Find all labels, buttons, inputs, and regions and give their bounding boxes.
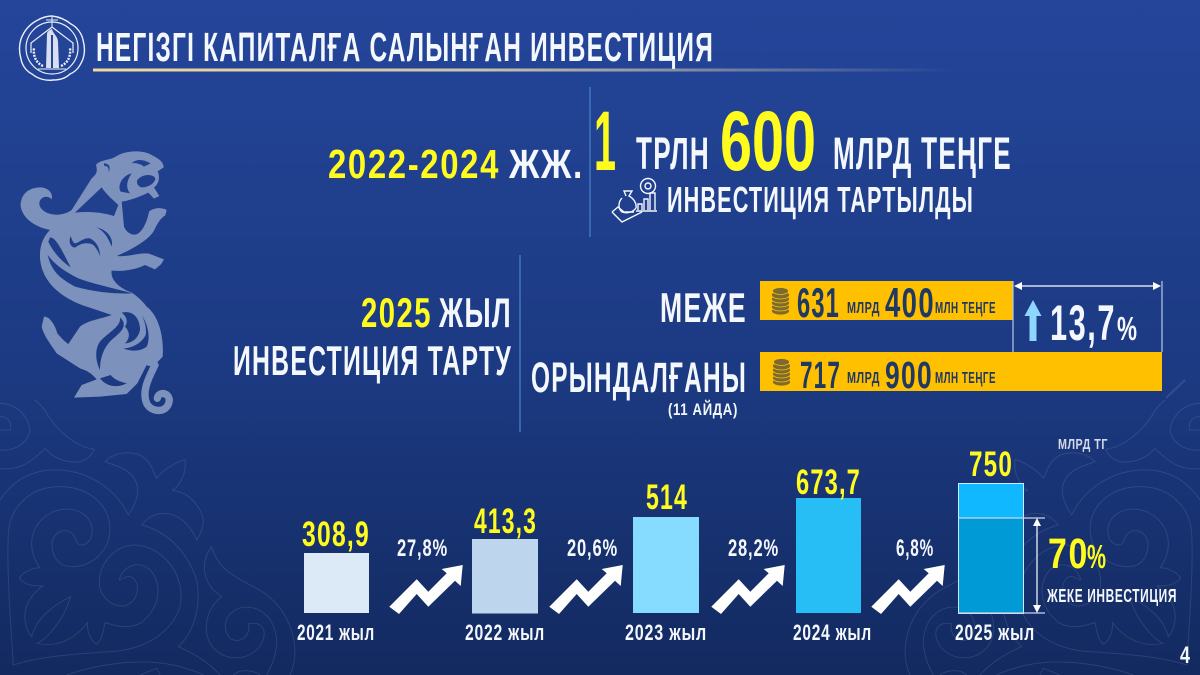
- headline amount: [594, 94, 1012, 188]
- title: НЕГІЗГІ КАПИТАЛҒА САЛЫНҒАН ИНВЕСТИЦИЯ: [96, 24, 714, 70]
- bar 2024: 673,7: [796, 463, 861, 502]
- headline amount: МЛРД ТЕҢГЕ: [833, 128, 1012, 179]
- private share value: [1046, 530, 1177, 606]
- period label: ЖЖ.: [508, 141, 584, 187]
- growth 2022-2023: 20,6%: [567, 535, 618, 562]
- private share value: %: [1087, 538, 1106, 575]
- background ornament: right: [905, 400, 1200, 675]
- growth 2023-2024: 28,2%: [728, 535, 779, 562]
- tiger emblem: [21, 151, 169, 410]
- icon: investment: [612, 178, 657, 222]
- gold bar: actual: 717: [800, 355, 841, 397]
- gold bar: plan: 631: [797, 279, 840, 326]
- unit label: МЛРД ТГ: [1058, 436, 1108, 453]
- gold bar: plan: 400: [885, 279, 935, 326]
- growth percentage: 13,7: [1050, 295, 1116, 351]
- 2025 heading: 2025: [361, 289, 432, 336]
- gold bar: actual: [760, 352, 1162, 397]
- bar 2025: 750: [969, 445, 1013, 484]
- period label: 2022-2024: [328, 141, 500, 187]
- bar 2021: 308,9: [302, 515, 370, 554]
- growth 2022-2023: [549, 535, 623, 614]
- divider middle: [519, 255, 521, 432]
- private share bracket: [958, 518, 1045, 613]
- page number: 4: [1180, 642, 1190, 669]
- growth 2021-2022: 27,8%: [397, 535, 448, 562]
- headline amount: 600: [720, 94, 816, 188]
- bar 2024: 2024 жыл: [793, 620, 872, 645]
- growth 2024-2025: [871, 535, 945, 614]
- subheading: ИНВЕСТИЦИЯ ТАРТЫЛДЫ: [667, 179, 974, 220]
- row labels: (11 АЙДА): [668, 400, 738, 419]
- growth 2021-2022: [389, 535, 463, 614]
- gold bar: actual: 900: [885, 355, 933, 397]
- headline amount: 1: [594, 94, 616, 188]
- bar 2025: [955, 445, 1035, 645]
- divider top: [589, 87, 591, 237]
- growth 2023-2024: [711, 535, 785, 614]
- bar 2022: [465, 502, 545, 645]
- gold bar: actual: МЛРД: [847, 370, 880, 387]
- bar 2022: 413,3: [474, 502, 537, 541]
- title underline: [93, 68, 953, 72]
- icon: up arrow: [1024, 300, 1042, 341]
- gold bar: actual: МЛН ТЕҢГЕ: [935, 370, 996, 387]
- corner chevron accent: [1166, 380, 1185, 398]
- difference bracket: [1013, 281, 1162, 352]
- gold bar: plan: [760, 279, 1013, 326]
- background ornament: left: [0, 400, 295, 675]
- 2025 heading: ЖЫЛ: [438, 289, 512, 336]
- private share value: 70: [1048, 530, 1089, 578]
- growth percentage: %: [1117, 310, 1137, 347]
- row labels: [531, 284, 747, 419]
- bar 2023: [625, 478, 707, 645]
- 2025 heading: [233, 289, 512, 384]
- bar 2021: 2021 жыл: [297, 620, 375, 645]
- bar 2025: 2025 жыл: [955, 620, 1035, 645]
- logo emblem: [20, 16, 84, 80]
- gold bar: plan: МЛРД: [847, 300, 880, 317]
- row labels: МЕЖЕ: [660, 284, 747, 331]
- bar 2021: [297, 515, 375, 645]
- 2025 heading: ИНВЕСТИЦИЯ ТАРТУ: [233, 337, 512, 384]
- bar 2023: 2023 жыл: [625, 620, 707, 645]
- bar 2024: [793, 463, 872, 645]
- growth 2024-2025: 6,8%: [896, 535, 934, 562]
- headline amount: ТРЛН: [636, 128, 710, 179]
- row labels: ОРЫНДАЛҒАНЫ: [531, 354, 747, 402]
- gold bar: plan: МЛН ТЕҢГЕ: [935, 300, 996, 317]
- bar 2023: 514: [646, 478, 688, 517]
- bar 2022: 2022 жыл: [465, 620, 545, 645]
